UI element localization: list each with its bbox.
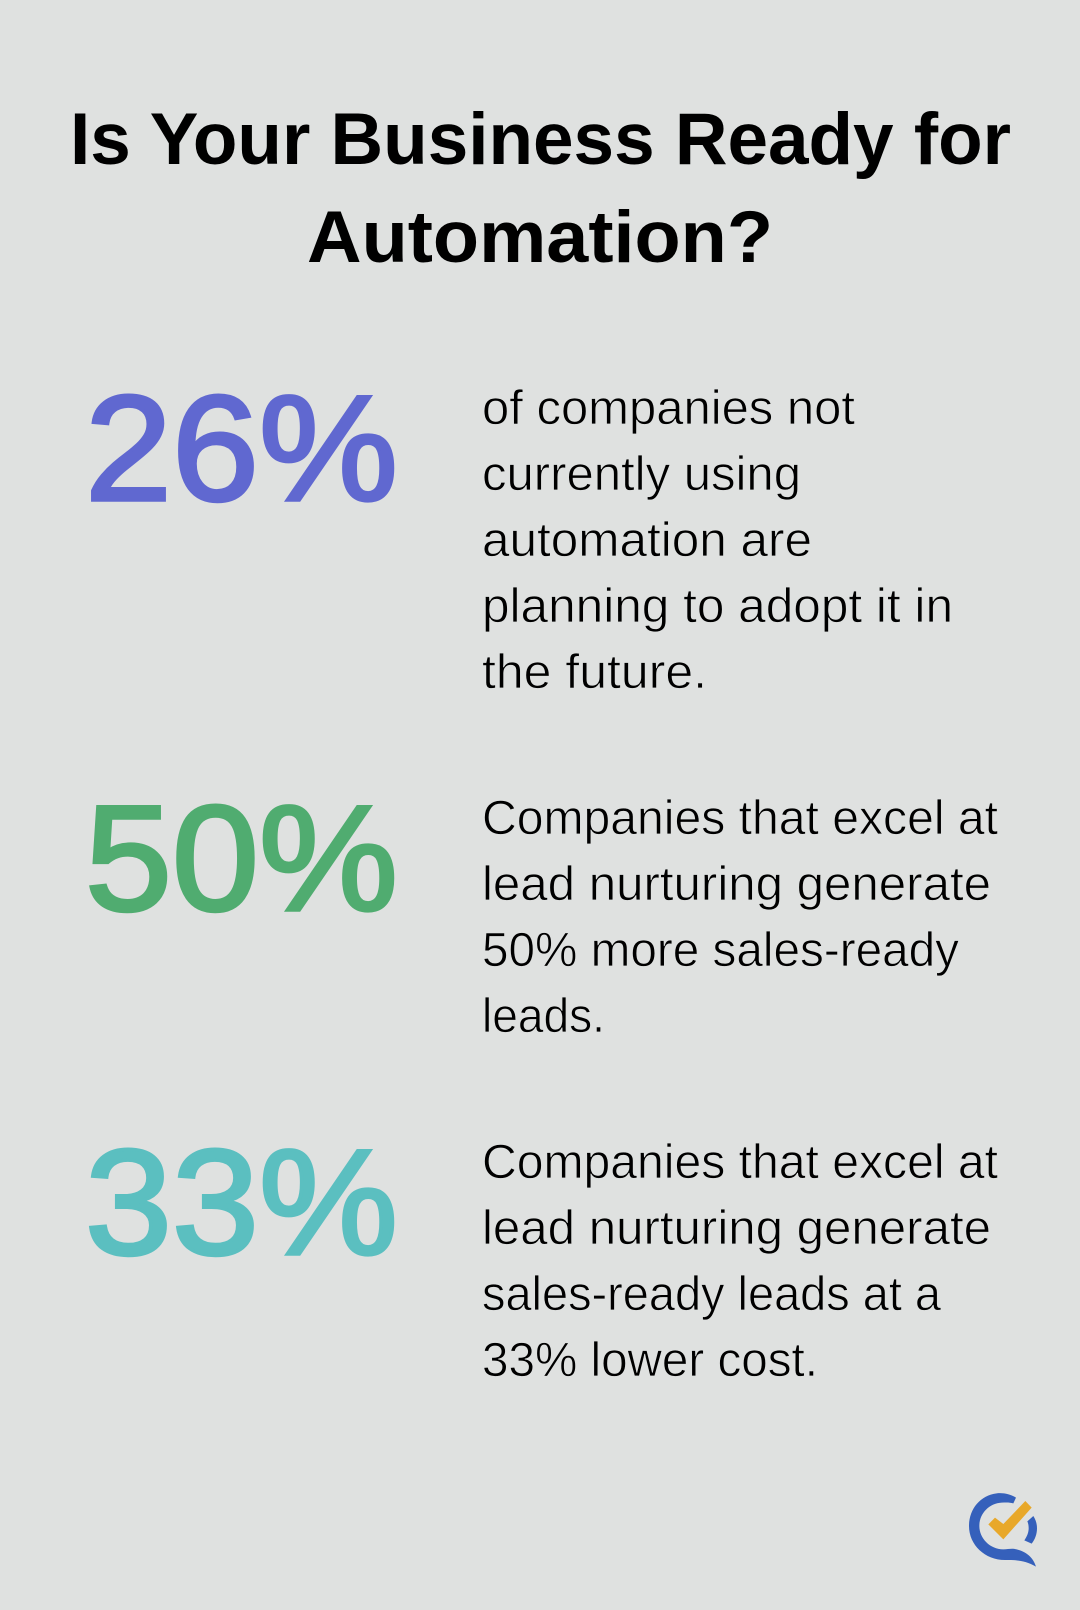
title: Is Your Business Ready for	[70, 99, 1011, 180]
stat description: 50%: Companies that excel at	[482, 792, 998, 845]
icon: logo speech bubble with check mark	[969, 1493, 1037, 1567]
stat description: 26%: the future.	[482, 646, 707, 699]
stat description: 33%: 33% lower cost.	[482, 1334, 818, 1387]
stat description: 26%: automation are	[482, 514, 812, 567]
stat description: 50%	[482, 792, 998, 1043]
stat description: 26%: currently using	[482, 448, 801, 501]
stat description: 33%: sales-ready leads at a	[482, 1268, 941, 1321]
stat description: 26%	[482, 382, 953, 699]
stat number: 50%: 50%	[85, 774, 398, 942]
stat number: 33%: 33%	[85, 1118, 398, 1286]
title: Automation?	[307, 197, 773, 278]
stat description: 50%: leads.	[482, 990, 605, 1043]
panel: stat 26%	[85, 364, 953, 699]
stat description: 50%: lead nurturing generate	[482, 858, 991, 911]
panel: stat 33%	[85, 1118, 998, 1387]
stat description: 33%: lead nurturing generate	[482, 1202, 991, 1255]
stat description: 26%: planning to adopt it in	[482, 580, 953, 633]
panel: stat 50%	[85, 774, 998, 1043]
stat number: 26%: 26%	[85, 364, 398, 532]
stat description: 26%: of companies not	[482, 382, 855, 435]
stat description: 33%	[482, 1136, 998, 1387]
stat description: 33%: Companies that excel at	[482, 1136, 998, 1189]
title	[70, 99, 1011, 278]
stat description: 50%: 50% more sales-ready	[482, 924, 959, 977]
